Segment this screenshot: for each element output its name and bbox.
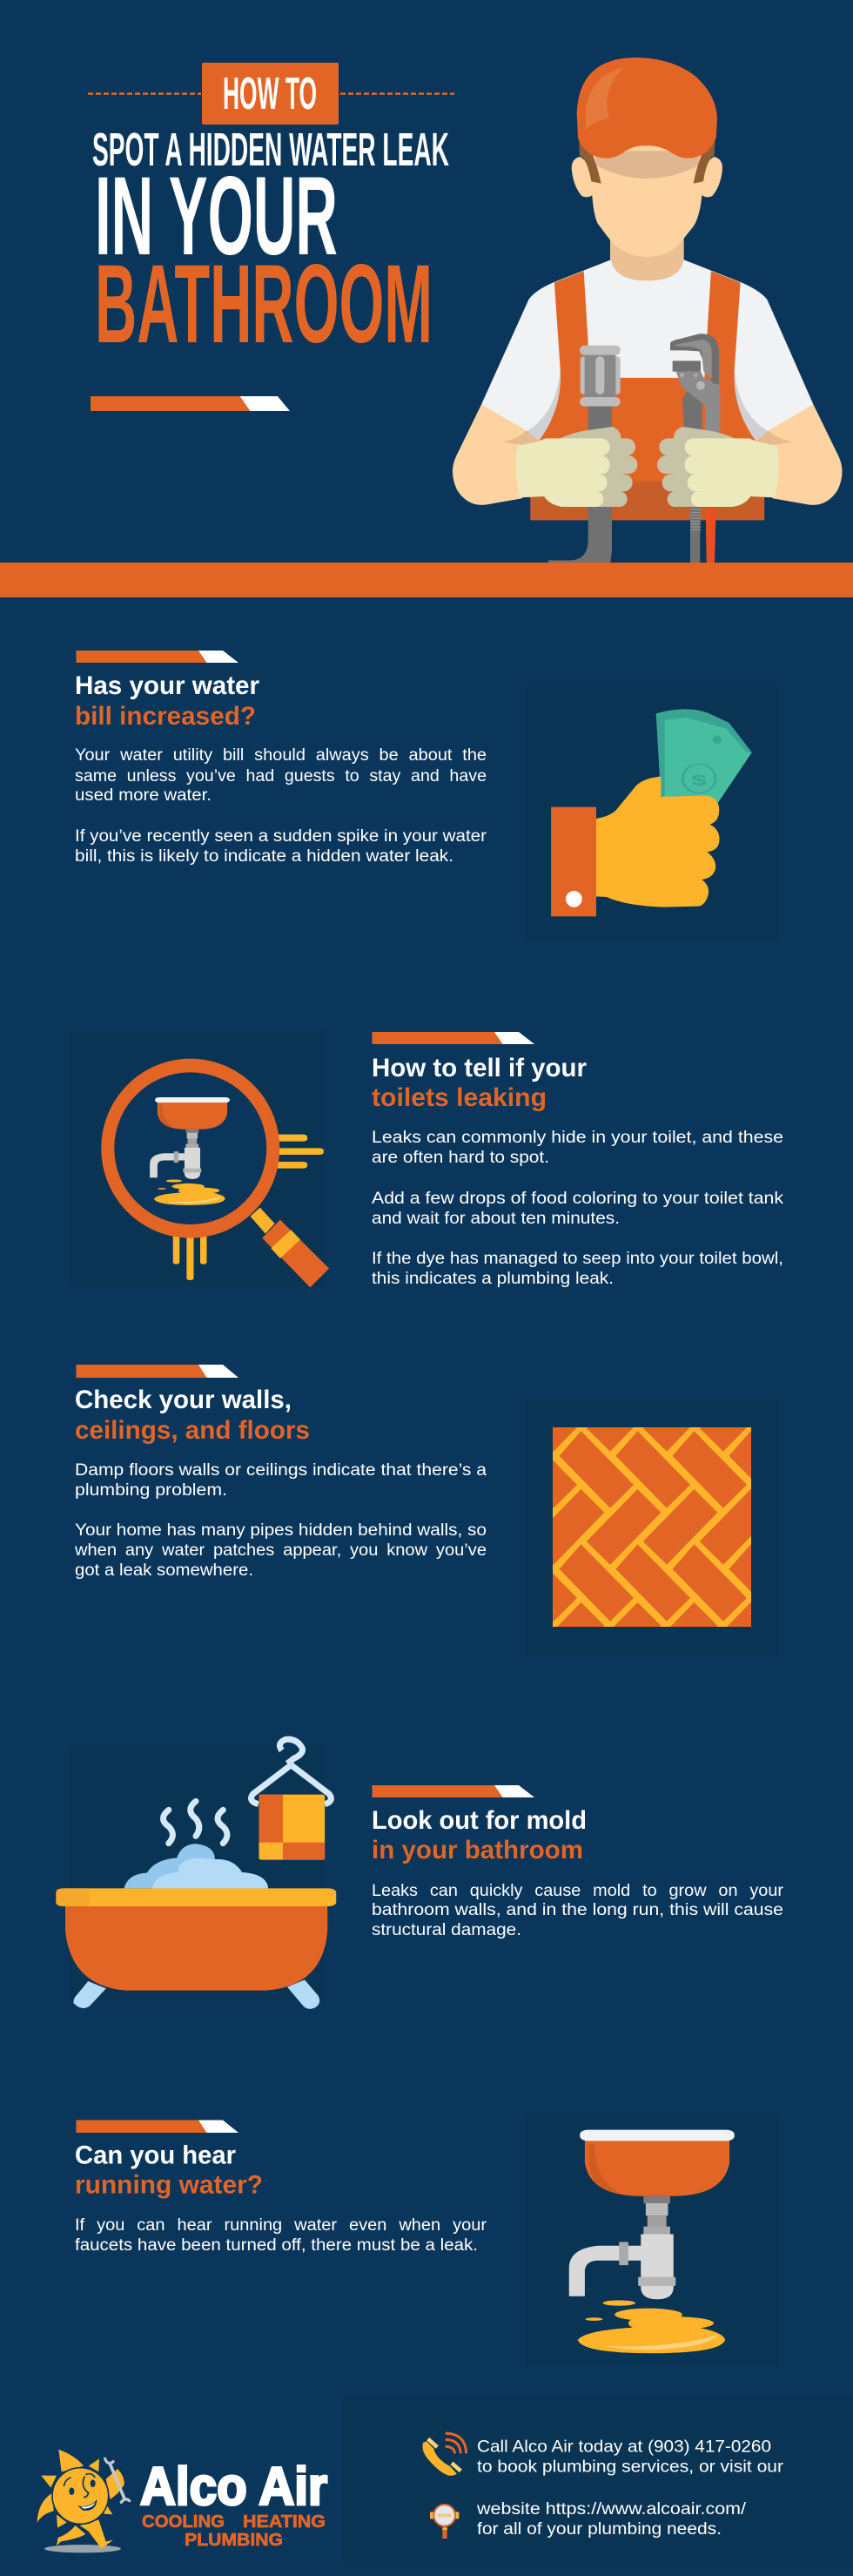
shadow <box>44 2545 121 2552</box>
logo: wordmark: PLUMBING <box>185 2531 283 2550</box>
section bar <box>77 651 238 663</box>
plumber head <box>572 57 722 281</box>
body text: when any water patches appear, you know you’ve <box>74 1541 487 1560</box>
section bar <box>77 2120 238 2133</box>
body text: are often hard to spot. <box>372 1149 549 1167</box>
lower shaft of left tool <box>548 505 612 563</box>
wrench <box>105 2458 130 2502</box>
feet <box>73 1979 319 2009</box>
body text <box>372 1882 784 1939</box>
heading: in your bathroom <box>372 1836 583 1865</box>
icon: herringbone brick wall <box>553 1427 751 1627</box>
icon: website magnifier <box>430 2505 459 2539</box>
apron lower <box>530 446 764 520</box>
illustration: plumber <box>453 57 843 563</box>
sink rim <box>580 2130 735 2141</box>
icon: leaking sink <box>569 2130 735 2353</box>
heading: How to tell if your <box>372 1054 587 1082</box>
red blade <box>706 505 716 563</box>
heading: toilets leaking <box>372 1083 547 1112</box>
sun rays and limbs <box>37 2450 124 2549</box>
body text: faucets have been turned off, there must be a leak. <box>75 2236 478 2255</box>
right arm <box>750 404 843 505</box>
body text: If the dye has managed to seep into your toilet bowl, <box>372 1250 783 1268</box>
body text: If you can hear running water even when your <box>75 2216 487 2235</box>
cuff button <box>566 891 582 907</box>
title line 3: BATHROOM <box>95 242 433 367</box>
ears <box>572 157 722 197</box>
body text: and wait for about ten minutes. <box>372 1210 620 1228</box>
section 4: mold <box>56 1739 784 2009</box>
heading <box>75 671 259 731</box>
heading: Has your water <box>75 671 259 700</box>
apron <box>534 271 761 447</box>
header: title block <box>88 63 454 411</box>
cap shadow <box>594 151 699 179</box>
tools and gloves <box>516 334 779 563</box>
logo: wordmark: COOLING <box>142 2512 225 2532</box>
body text: Your water utility bill should always be about the <box>75 746 487 765</box>
body text <box>75 746 487 866</box>
heading: bill increased? <box>75 702 256 731</box>
image panel <box>525 1400 779 1655</box>
yellow streaks <box>173 1135 324 1280</box>
plumber body <box>453 260 843 520</box>
hand <box>596 777 719 907</box>
hair <box>579 138 715 184</box>
heading <box>372 1806 587 1865</box>
heading <box>75 1386 310 1445</box>
banknote details <box>656 709 752 799</box>
contact text: to book plumbing services, or visit our <box>477 2458 784 2476</box>
right glove <box>657 427 779 507</box>
image panel <box>69 1746 324 2000</box>
orange floor band <box>0 563 853 597</box>
body text: bathroom walls, and in the long run, this will cause <box>372 1901 783 1919</box>
cuff <box>551 807 596 916</box>
puddle highlight <box>604 2335 718 2350</box>
body text <box>372 1129 784 1288</box>
body text: used more water. <box>75 786 212 805</box>
body text: plumbing problem. <box>75 1481 227 1500</box>
puddle <box>578 2300 725 2353</box>
tub body <box>65 1905 327 1991</box>
body text <box>74 1461 487 1580</box>
shirt <box>481 260 813 447</box>
body text: same unless you’ve had guests to stay and have <box>75 767 487 786</box>
section bar <box>373 1032 534 1044</box>
contact text: for all of your plumbing needs. <box>477 2520 722 2539</box>
magnifier lens <box>114 1072 266 1224</box>
bottom strip <box>0 2574 853 2576</box>
sleeve shadows <box>527 368 768 446</box>
arm folds <box>503 431 792 445</box>
body text: bill, this is likely to indicate a hidden water leak. <box>75 847 453 866</box>
logo: mascot <box>37 2450 130 2552</box>
heading <box>372 1054 587 1112</box>
body text: this indicates a plumbing leak. <box>372 1270 614 1288</box>
body text: Leaks can quickly cause mold to grow on your <box>372 1882 784 1900</box>
header accent bar <box>91 396 290 411</box>
foam back <box>124 1844 268 1888</box>
cap <box>577 57 717 158</box>
heading: Check your walls, <box>75 1386 292 1414</box>
section 1: water bill <box>75 651 779 940</box>
icon: website magnifier: WWW <box>438 2513 452 2519</box>
section bar <box>77 1365 238 1378</box>
drain pipes <box>569 2196 675 2299</box>
how to badge <box>202 63 339 125</box>
section 5: running water <box>75 2114 779 2367</box>
left arm <box>453 404 544 505</box>
footer <box>0 2395 853 2576</box>
icon: magnifying glass <box>101 1059 329 1287</box>
threads <box>690 509 701 529</box>
section bar <box>373 1785 534 1797</box>
title line 1: SPOT A HIDDEN WATER LEAK <box>92 124 449 176</box>
contact panel <box>343 2395 853 2566</box>
small sink in lens <box>150 1097 230 1205</box>
dashed line right <box>340 92 454 95</box>
contact text <box>476 2438 784 2539</box>
icon: bathtub with towel <box>56 1739 336 2009</box>
face details <box>64 2474 97 2511</box>
icon: hand holding money <box>551 709 752 916</box>
icon: phone <box>422 2433 467 2476</box>
section 3: walls <box>75 1365 751 1627</box>
body text <box>75 2216 487 2255</box>
image panel <box>525 685 779 940</box>
sink bowl <box>585 2140 729 2196</box>
title line 2: IN YOUR <box>95 154 338 279</box>
magnifier handle <box>262 1220 329 1287</box>
bowl shade <box>589 2144 620 2194</box>
magnifier ring <box>101 1059 279 1238</box>
hanger <box>252 1739 331 1804</box>
banknote <box>656 709 752 803</box>
face <box>592 142 702 257</box>
body text: Your home has many pipes hidden behind walls, so <box>75 1521 487 1540</box>
logo: wordmark: HEATING <box>243 2512 326 2532</box>
how to label: HOW TO <box>223 69 317 119</box>
left glove <box>516 427 637 507</box>
heading <box>75 2141 263 2200</box>
heading: running water? <box>75 2170 263 2200</box>
heading: Can you hear <box>75 2141 236 2170</box>
right tool wrench <box>670 334 720 440</box>
logo: wordmark <box>140 2457 327 2550</box>
cap highlight <box>585 67 624 130</box>
body text: Leaks can commonly hide in your toilet, and these <box>372 1129 783 1147</box>
sun face <box>52 2468 109 2524</box>
banknote details: $ <box>691 772 707 789</box>
heading: ceilings, and floors <box>75 1416 310 1445</box>
image panel <box>525 2114 779 2367</box>
contact text: website https://www.alcoair.com/ <box>476 2500 747 2519</box>
towel <box>259 1795 325 1860</box>
dashed line left <box>88 92 201 95</box>
steam <box>164 1801 227 1844</box>
contact text: Call Alco Air today at (903) 417-0260 <box>477 2438 771 2457</box>
apron pocket shade <box>530 482 764 520</box>
body text: Add a few drops of food coloring to your toilet tank <box>372 1190 784 1208</box>
body text: structural damage. <box>372 1921 521 1939</box>
body text: If you’ve recently seen a sudden spike in your water <box>75 827 487 846</box>
lower threaded shaft <box>690 505 700 563</box>
foam front <box>152 1858 268 1888</box>
body text: Damp floors walls or ceilings indicate that there’s a <box>75 1461 487 1480</box>
body text: got a leak somewhere. <box>75 1561 253 1580</box>
tub rim <box>56 1888 336 1906</box>
handle stripe <box>271 1230 300 1258</box>
heading: Look out for mold <box>372 1806 587 1835</box>
logo: wordmark: Alco Air <box>140 2457 327 2516</box>
image panel <box>69 1030 324 1286</box>
section 2: toilet leaks <box>69 1030 784 1288</box>
rim shade <box>56 1888 90 1906</box>
left tool head <box>580 346 621 440</box>
neck <box>610 233 684 281</box>
